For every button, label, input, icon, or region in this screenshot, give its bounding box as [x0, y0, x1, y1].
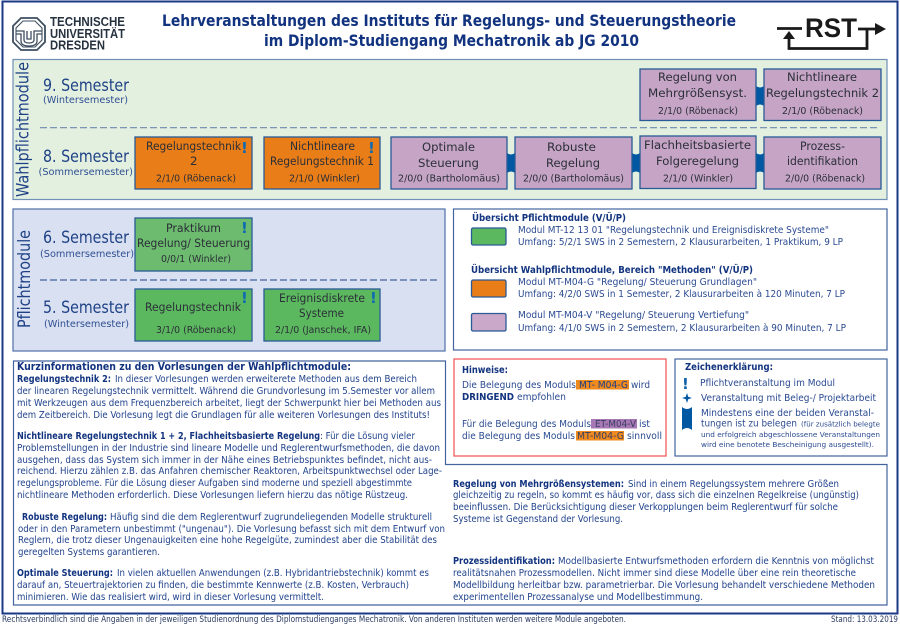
module: Ereignisdiskrete Systeme: Systeme [299, 306, 344, 320]
title: im Diplom-Studiengang Mechatronik ab JG 2010 [264, 31, 639, 50]
module: Robuste Regelung: Regelung [546, 156, 600, 170]
logo wordmark [50, 14, 125, 52]
text block: Prozessidentifikation: Prozessidentifikation: [453, 556, 555, 567]
semester label: 6. Semester: 6. Semester [43, 227, 129, 247]
note: dringend empfohlen [462, 380, 650, 403]
text block: Nichtlineare Regelungstechnik: Problemstellungen in der Industrie sind lineare Modelle und Reglerentwurfsmethoden, die davon [17, 443, 440, 454]
module: Ereignisdiskrete Systeme [264, 289, 380, 341]
module: Regelungstechnik: Regelungstechnik [145, 300, 241, 314]
note: sinnvoll: ET-M04-V [595, 419, 637, 430]
text block: Nichtlineare Regelungstechnik: : Für die Lösung vieler [320, 431, 415, 442]
note: dringend empfohlen: Die Belegung des Moduls [462, 380, 576, 391]
legend text: Beleg: Veranstaltung mit Beleg-/ Projektarbeit [701, 393, 876, 404]
text block: Regelung von Mehrgrößensystemen: gleichzeitig zu regeln, so kommt es häufig vor, dass sich die einzelnen Regelkreise (ungünstig) [453, 490, 859, 501]
text block: Regelung von Mehrgrößensystemen: beeinflussen. Die Berücksichtigung dieser Verkopplungen beim Reglerentwurf für solche [453, 502, 838, 513]
module: Praktikum Regelung/ Steuerung [135, 218, 252, 271]
note: dringend empfohlen: wird [631, 380, 650, 391]
text block: Regelung von Mehrgrößensystemen [453, 479, 859, 525]
module: Praktikum Regelung/ Steuerung: Regelung/ Steuerung [137, 236, 250, 250]
semester label: 8. Semester [38, 146, 133, 178]
module: Regelungstechnik [135, 289, 252, 341]
module: Regelung von Mehrgrößensyst.: Regelung von [658, 70, 737, 84]
vertical heading: Pflichtmodule: Pflichtmodule [14, 230, 34, 328]
logo wordmark: DRESDEN [50, 38, 105, 52]
text block: Nichtlineare Regelungstechnik: reichend. Hierzu zählen z.B. das Anfahren chemischer Reaktoren, Arbeitspunktwechsel oder Lage- [17, 466, 442, 477]
logo wordmark: TECHNISCHE [50, 14, 125, 29]
module: Ereignisdiskrete Systeme: 2/1/0 (Janschek, IFA) [275, 325, 371, 336]
note: dringend empfohlen: MT- M04-G [579, 380, 628, 391]
note: sinnvoll: die Belegung des Moduls [462, 431, 575, 442]
text block: Prozessidentifikation: Modellbildung herleitbar bzw. parametrierbar. Die Vorlesung behandelt verschiedene Methoden [453, 580, 875, 591]
title [162, 11, 736, 50]
connector: Mehrgrößensyst. and Nichtlineare 2 [756, 86, 764, 106]
icon: exclamation: ! [682, 375, 689, 393]
note: sinnvoll: Für die Belegung des Moduls [462, 419, 591, 430]
connector: Flachheitsbasierte and Prozessidentifikation [756, 153, 764, 173]
icon: TU octagon emblem [13, 18, 45, 50]
semester label: 9. Semester [43, 75, 129, 106]
text block: Optimale Steuerung: In vielen aktuellen Anwendungen (z.B. Hybridantriebstechnik) kommt es [117, 568, 429, 579]
legend swatch: green [472, 228, 506, 245]
module: Optimale Steuerung: Optimale [422, 140, 475, 154]
semester label: 9. Semester: 9. Semester [43, 75, 129, 95]
semester label: 9. Semester: (Wintersemester) [43, 95, 128, 106]
note: sinnvoll: ist [639, 419, 650, 430]
logo: RST [777, 13, 886, 48]
module: Regelungstechnik 2: Regelungstechnik [146, 139, 241, 153]
semester label: 5. Semester: (Wintersemester) [44, 319, 129, 330]
heading: Hinweise: Hinweise: [462, 365, 508, 376]
text block: Prozessidentifikation: realitätsnahen Prozessmodellen. Nicht immer sind diese Modelle über eine rein theoretische [453, 568, 856, 579]
module: Optimale Steuerung: 2/0/0 (Bartholomäus) [398, 174, 500, 184]
panel: Zeichenerklärung [675, 359, 887, 456]
semester label: 8. Semester: (Sommersemester) [38, 167, 133, 178]
text block: Regelungstechnik 2: mit Werkzeugen aus dem Frequenzbereich arbeitet, liegt der Schwerpunkt hier bei Methoden aus [17, 398, 441, 409]
module: Praktikum Regelung/ Steuerung: 0/0/1 (Winkler) [161, 254, 231, 265]
module: Nichtlineare Regelungstechnik 1: Nichtlineare [290, 139, 355, 153]
module: Robuste Regelung [515, 137, 632, 189]
module: Prozessidentifikation: identifikation [787, 154, 858, 168]
panel: Wahlpflichtmodule [12, 60, 887, 200]
module: Prozessidentifikation: 2/0/0 (Röbenack) [785, 174, 865, 184]
icon: exclamation: ! [241, 139, 248, 157]
legend text: MT-12 13 01: Modul MT-12 13 01 "Regelungstechnik und Ereignisdiskrete Systeme" [518, 225, 829, 236]
module: Regelungstechnik 2: 2 [190, 154, 198, 168]
legend text: MT-M04-V [518, 310, 846, 334]
text block: Regelungstechnik 2: In dieser Vorlesungen werden erweiterete Methoden aus dem Bereich [115, 374, 417, 385]
text block: Prozessidentifikation [453, 556, 875, 603]
icon: plus [683, 394, 691, 402]
module: Nichtlineare Regelungstechnik 2: Regelungstechnik 2 [766, 86, 879, 100]
heading: Übersicht Wahlpflichtmodule: Übersicht Wahlpflichtmodule, Bereich "Methoden" (V/Ü/P) [471, 265, 753, 276]
semester label: 6. Semester: (Sommersemester) [40, 249, 134, 260]
legend text: Mindestens eine: und erfolgreich abgeschlossene Veranstaltungen [701, 430, 880, 439]
legend text: MT-M04-G [518, 277, 845, 300]
legend text: Mindestens eine: (für zusätzlich belegte [801, 420, 881, 428]
heading: Übersicht Pflichtmodule: Übersicht Pflichtmodule (V/Ü/P) [472, 213, 626, 224]
module: Nichtlineare Regelungstechnik 2: Nichtlineare [787, 70, 857, 84]
legend text: MT-M04-V: Umfang: 4/1/0 SWS in 2 Semestern, 2 Klausurarbeiten à 90 Minuten, 7 LP [518, 323, 846, 334]
text block: Regelung von Mehrgrößensystemen: Sind in einem Regelungssystem mehrere Größen [628, 479, 839, 490]
legend text: Mindestens eine [701, 408, 881, 449]
module: Robuste Regelung: 2/0/0 (Bartholomäus) [523, 174, 624, 184]
module: Ereignisdiskrete Systeme: Ereignisdiskrete [279, 291, 365, 305]
legend swatch: orange [472, 280, 506, 297]
text block: Robuste Regelung: Reglern, die trotz dieser Ungenauigkeiten eine hohe Regelgüte, zumindest aber die Stabilität des [18, 535, 437, 546]
text block: Robuste Regelung [18, 512, 445, 558]
heading: Kurzinformationen: Kurzinformationen zu den Vorlesungen der Wahlpflichtmodule: [17, 361, 351, 373]
module: Praktikum Regelung/ Steuerung: Praktikum [166, 221, 221, 235]
module: Optimale Steuerung: Steuerung [418, 156, 479, 170]
text block: Optimale Steuerung: minimieren. Wie das realisiert wird, wird in dieser Vorlesung vermittelt. [17, 592, 324, 603]
module: Regelung von Mehrgrößensyst.: Mehrgrößensyst. [648, 86, 747, 100]
panel: lecture summaries [14, 361, 887, 605]
logo: RST: RST [805, 13, 857, 43]
title: Lehrveranstaltungen des Instituts für Regelungs- und Steuerungstheorie [162, 11, 736, 30]
semester label: 8. Semester: 8. Semester [43, 146, 129, 166]
highlight: MT- M04-G [576, 380, 629, 390]
legend text: Mindestens eine: Mindestens eine der beiden Veranstal- [701, 408, 874, 419]
note: sinnvoll [462, 419, 662, 442]
text block: Nichtlineare Regelungstechnik: regelungsprobleme. Für die Lösung dieser Aufgaben sind moderne und speziell abgestimmte [17, 478, 412, 489]
note: sinnvoll: sinnvoll [627, 431, 662, 442]
module: Flachheitsbasierte Folgeregelung [640, 136, 756, 188]
text block: Regelungstechnik 2: Regelungstechnik 2: [17, 374, 111, 385]
panel: Hinweise [454, 359, 666, 456]
module: Prozessidentifikation: Prozess- [800, 139, 845, 153]
note: dringend empfohlen: DRINGEND [462, 392, 514, 403]
text block: Nichtlineare Regelungstechnik: nichtlineare Methoden erforderlich. Diese Vorlesungen liefern hierzu das nötige Rüstzeug. [17, 490, 408, 501]
highlight: ET-M04-V [591, 419, 637, 428]
highlight: MT-M04-G [576, 431, 624, 440]
module: Nichtlineare Regelungstechnik 1: 2/1/0 (Winkler) [289, 174, 360, 184]
text block: Robuste Regelung: Robuste Regelung: [22, 512, 107, 523]
legend text: MT-M04-G: Modul MT-M04-G "Regelung/ Steuerung Grundlagen" [518, 277, 757, 288]
text block: Robuste Regelung: oder in den Parametern unbestimmt ("ungenau"). Die Vorlesung befasst sich mit dem Entwurf von [18, 524, 445, 535]
legend text: Mindestens eine: tungen ist zu belegen [701, 418, 797, 430]
connector: Robuste and Flachheitsbasierte [632, 153, 640, 173]
text block: Prozessidentifikation: Modellbasierte Entwurfsmethoden erfordern die Kenntnis von möglichst [558, 556, 874, 567]
module: Flachheitsbasierte Folgeregelung: Flachheitsbasierte [644, 138, 751, 152]
module: Optimale Steuerung [391, 137, 507, 189]
legend text: MT-M04-G: Umfang: 4/2/0 SWS in 1 Semester, 2 Klausurarbeiten à 120 Minuten, 7 LP [518, 289, 845, 300]
text block: Nichtlineare Regelungstechnik [17, 431, 442, 501]
text block: Robuste Regelung: geregelten Systems garantieren. [18, 547, 160, 558]
module: Flachheitsbasierte Folgeregelung: Folgeregelung [656, 154, 739, 168]
text block: Regelung von Mehrgrößensystemen: Systeme ist Gegenstand der Vorlesung. [453, 514, 623, 525]
module: Robuste Regelung: Robuste [547, 140, 596, 154]
semester label: 5. Semester [43, 297, 129, 330]
module: Regelungstechnik: 3/1/0 (Röbenack) [156, 325, 236, 336]
text block: Nichtlineare Regelungstechnik: Nichtlineare Regelungstechnik 1 + 2, Flachheitsbasierte Regelung [17, 431, 320, 442]
text block: Optimale Steuerung: Optimale Steuerung: [17, 568, 113, 579]
legend text: MT-12 13 01 [518, 225, 843, 248]
icon: exclamation: ! [370, 289, 377, 307]
module: Regelung von Mehrgrößensyst. [640, 69, 756, 120]
vertical heading: Wahlpflichtmodule: Wahlpflichtmodule [12, 62, 32, 197]
text block: Optimale Steuerung: darauf an, Steuertrajektorien zu finden, die bestimmte Kennwerte (z.B. Kosten, Verbrauch) [17, 580, 409, 591]
module: Nichtlineare Regelungstechnik 1: Regelungstechnik 1 [270, 154, 374, 168]
note: dringend empfohlen: empfohlen [517, 392, 566, 403]
module: Regelung von Mehrgrößensyst.: 2/1/0 (Röbenack) [658, 106, 738, 117]
legend text: Mindestens eine: wird eine benotete Bescheinigung ausgestellt). [701, 440, 874, 449]
legend text: MT-M04-V: Modul MT-M04-V "Regelung/ Steuerung Vertiefung" [518, 310, 749, 321]
semester label: 5. Semester: 5. Semester [43, 297, 129, 317]
text block: Robuste Regelung: Häufig sind die dem Reglerentwurf zugrundeliegenden Modelle strukturell [110, 512, 432, 523]
icon: connector bookmark [682, 407, 692, 430]
semester label: 6. Semester [40, 227, 134, 260]
icon: exclamation: ! [241, 289, 248, 307]
note: sinnvoll: MT-M04-G [577, 431, 624, 442]
legend swatch: purple [472, 314, 506, 331]
heading: Zeichenerklärung: Zeichenerklärung: [685, 362, 773, 373]
icon: exclamation: ! [241, 219, 248, 237]
logo wordmark: UNIVERSITÄT [50, 26, 125, 41]
module: Regelungstechnik 2 [135, 137, 252, 189]
text block: Nichtlineare Regelungstechnik: ausgehen, dass das System sich immer in der Nähe eines Betriebspunktes befindet, nicht aus- [17, 455, 432, 466]
module: Regelungstechnik 2: 2/1/0 (Röbenack) [156, 174, 236, 184]
module: Prozessidentifikation [764, 137, 881, 189]
legend text: Pflichtveranstaltung: Pflichtveranstaltung im Modul [700, 378, 835, 389]
legend text: MT-12 13 01: Umfang: 5/2/1 SWS in 2 Semestern, 2 Klausurarbeiten, 1 Praktikum, 9 LP [518, 237, 843, 248]
module: Nichtlineare Regelungstechnik 2: 2/1/0 (Röbenack) [782, 106, 863, 117]
module: Nichtlineare Regelungstechnik 2 [764, 69, 881, 120]
logo: TU Dresden [13, 14, 125, 52]
connector: Optimale and Robuste [507, 153, 515, 173]
text block: Prozessidentifikation: experimentellen Prozessanalyse und Modellbestimmung. [453, 592, 703, 603]
text block: Regelungstechnik 2 [17, 374, 441, 421]
module: Flachheitsbasierte Folgeregelung: 2/1/0 (Winkler) [663, 174, 733, 184]
text block: Regelungstechnik 2: der linearen Regelungstechnik vermittelt. Während die Grundvorlesung im 5.Semester vor allem [17, 386, 435, 397]
panel: legend overview [454, 209, 887, 350]
text block: Regelungstechnik 2: dem Zeitbereich. Die Vorlesung legt die Grundlagen für alle weiteren Vorlesungen des Instituts! [17, 410, 430, 421]
module: Nichtlineare Regelungstechnik 1 [264, 137, 380, 189]
panel: Pflichtmodule [13, 209, 445, 351]
icon: exclamation: ! [368, 139, 375, 157]
text block: Optimale Steuerung [17, 568, 429, 603]
text block: Regelung von Mehrgrößensystemen: Regelung von Mehrgrößensystemen: [453, 479, 624, 490]
